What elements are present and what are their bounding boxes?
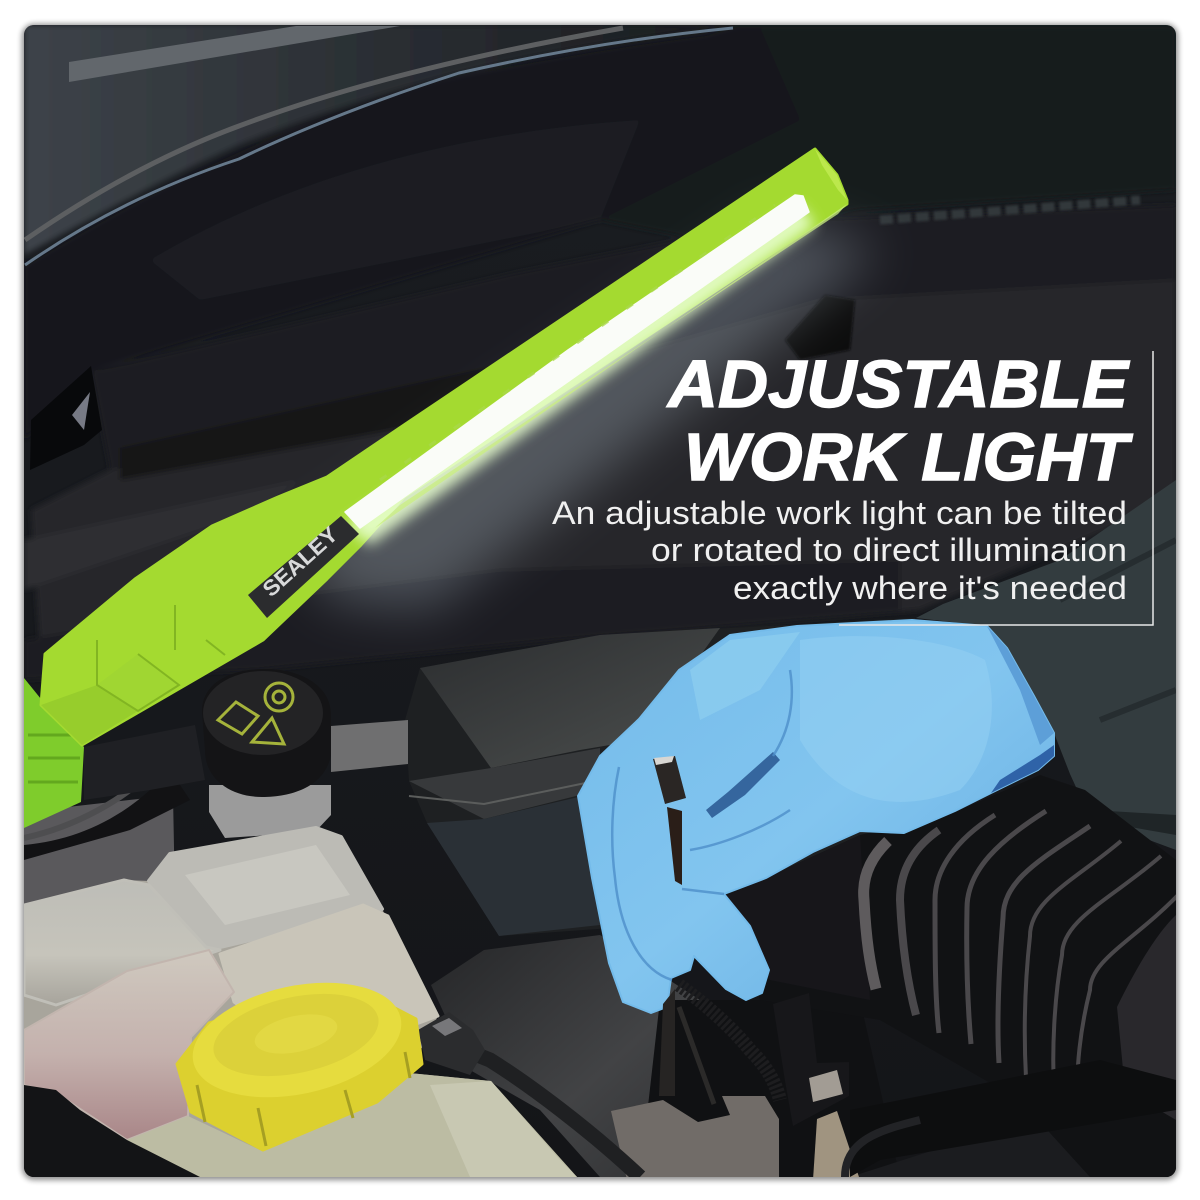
- description: An adjustable work light can be tilted: [552, 495, 1127, 531]
- windscreen scuttle background: [24, 25, 1176, 680]
- mudguard and grey shroud: [24, 725, 205, 905]
- heading: ADJUSTABLE: [666, 347, 1130, 422]
- corrugated black hose: [772, 780, 1176, 1177]
- text block frame: [839, 351, 1153, 625]
- socket tool: [653, 756, 686, 804]
- yellow filler cap: [177, 965, 422, 1150]
- hinge base: [24, 678, 84, 828]
- black bracket: [30, 366, 102, 470]
- brand label: [248, 516, 359, 618]
- LED glow: [345, 205, 815, 545]
- green work light: [24, 149, 847, 828]
- wiper and right side objects: [785, 200, 1140, 360]
- handle and lamp body: [41, 149, 847, 745]
- black fluid reservoir cap: [202, 669, 408, 838]
- sleeve: [916, 480, 1176, 850]
- connector, pipe and grey block: [611, 985, 1176, 1180]
- bottom left black hose: [24, 1085, 200, 1177]
- gloved hand holding tool: [578, 620, 1054, 1104]
- LED strip: [345, 195, 809, 528]
- dark lower bay: [431, 935, 1176, 1177]
- heading: WORK LIGHT: [684, 420, 1133, 495]
- black cable and plug: [418, 1012, 640, 1177]
- seal strips: [25, 26, 733, 265]
- black engine cover: [408, 623, 868, 936]
- description: or rotated to direct illumination: [651, 532, 1127, 568]
- description: [552, 495, 1127, 606]
- coolant tank: [24, 828, 577, 1177]
- description: exactly where it's needed: [733, 570, 1127, 606]
- light beam glow: [300, 215, 880, 610]
- brand label: SEALEY: [258, 521, 343, 602]
- heading: [666, 347, 1133, 495]
